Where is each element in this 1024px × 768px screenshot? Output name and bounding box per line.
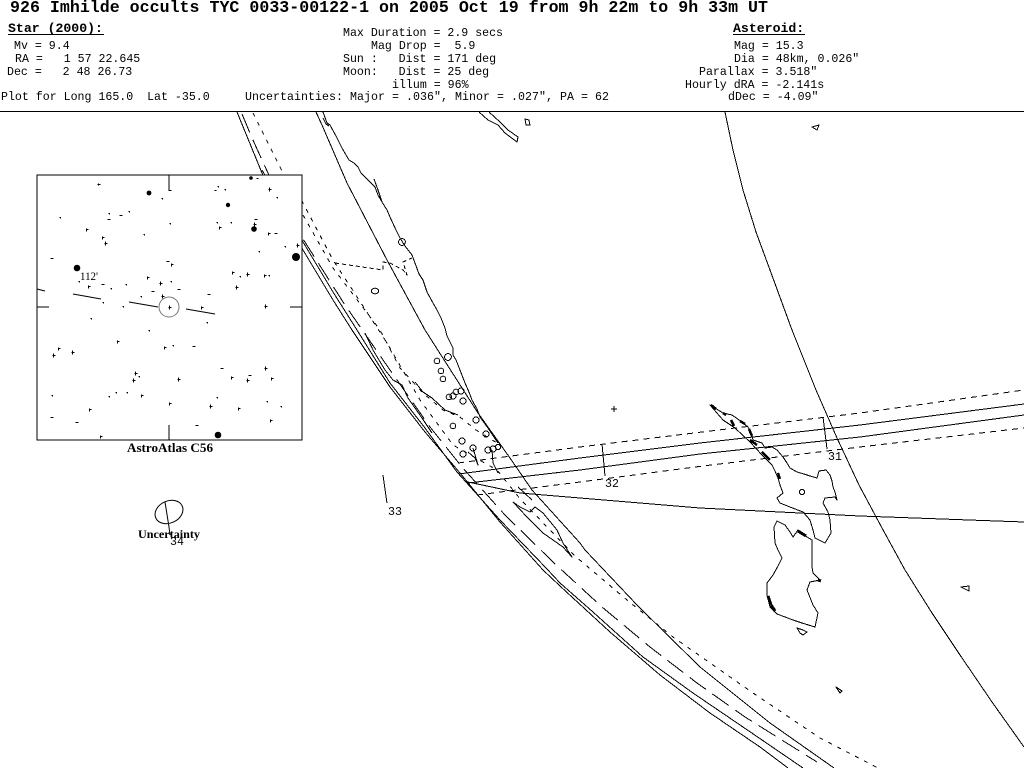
panel: event data: Moon: Dist = 25 deg [343, 66, 489, 79]
motion track [37, 289, 215, 314]
coast: inner chain [415, 382, 458, 415]
inset: star chart [37, 175, 302, 440]
plot location note: Plot for Long 165.0 Lat -35.0 [1, 91, 210, 104]
time tick 33 [383, 475, 402, 519]
time tick 32: 32 [605, 478, 619, 491]
New Zealand thick coast marks [711, 405, 780, 479]
shadow path east: solid lower [468, 415, 1024, 483]
path centre line: long dashes [242, 114, 817, 762]
panel: asteroid data: Asteroid: [733, 21, 804, 36]
panel: asteroid data [685, 21, 859, 104]
panel: event data: illum = 96% [392, 79, 469, 92]
coast: Australia east [323, 112, 498, 443]
shadow path east: dashed upper [458, 390, 1024, 463]
time tick 32 [602, 444, 619, 491]
panel: event data [343, 27, 503, 92]
New Zealand north island [710, 405, 837, 543]
sun altitude line [468, 482, 1024, 522]
Lake Taupo [799, 489, 805, 495]
coast: islands [468, 448, 478, 465]
label: 112 arcmin: 112' [80, 269, 98, 283]
panel: star data: Star (2000): [8, 21, 103, 36]
panel: star data: RA = 1 57 22.645 [15, 53, 140, 66]
map: occultation plot [237, 112, 1024, 768]
panel: star data [7, 21, 140, 79]
time tick 31 [823, 417, 842, 464]
caption: AstroAtlas C56: AstroAtlas C56 [127, 441, 213, 455]
bright stars [74, 176, 300, 438]
panel: star data: Mv = 9.4 [14, 40, 70, 53]
panel: asteroid data: dDec = -4.09" [728, 91, 818, 104]
panel: asteroid data: Dia = 48km, 0.026" [734, 53, 859, 66]
uncertainties note: Uncertainties: Major = .036", Minor = .027", PA = 62 [245, 91, 609, 104]
terminator arc [725, 112, 1024, 747]
panel: event data: Sun : Dist = 171 deg [343, 53, 496, 66]
crosshair ticks [37, 175, 302, 440]
path limit: upper solid [316, 112, 834, 768]
target star circle [159, 297, 179, 317]
Stewart Island [797, 628, 807, 635]
small islands [371, 119, 969, 693]
uncertainty ellipse: 34 [170, 536, 184, 549]
path limit: lower solid [237, 112, 788, 768]
panel: star data: Dec = 2 48 26.73 [7, 66, 132, 79]
shadow path east: dashed lower [477, 428, 1024, 495]
panel: asteroid data: Hourly dRA = -2.141s [685, 79, 824, 92]
panel: event data: Mag Drop = 5.9 [371, 40, 475, 53]
panel: asteroid data: Parallax = 3.518" [699, 66, 817, 79]
coast: top right peninsula [479, 112, 518, 142]
time tick 31: 31 [828, 451, 842, 464]
coast: cape spike [374, 179, 382, 202]
path limit: dotted [253, 113, 878, 768]
New Zealand south island [767, 521, 820, 627]
New Zealand south island thick marks [768, 531, 821, 611]
panel: asteroid data: Mag = 15.3 [734, 40, 804, 53]
uncertainty ellipse: Uncertainty [138, 529, 200, 541]
second dotted sigma line [303, 215, 497, 443]
time tick 33: 33 [388, 506, 402, 519]
faint stars [50, 178, 300, 438]
state boundary [335, 258, 412, 275]
coast: top end thick [323, 118, 329, 126]
map centre cross [611, 406, 617, 412]
panel: event data: Max Duration = 2.9 secs [343, 27, 503, 40]
coast: inner reef [365, 333, 432, 433]
shadow path east: solid upper [459, 404, 1024, 474]
uncertainty ellipse [138, 496, 200, 549]
path limit: second solid [262, 170, 803, 768]
